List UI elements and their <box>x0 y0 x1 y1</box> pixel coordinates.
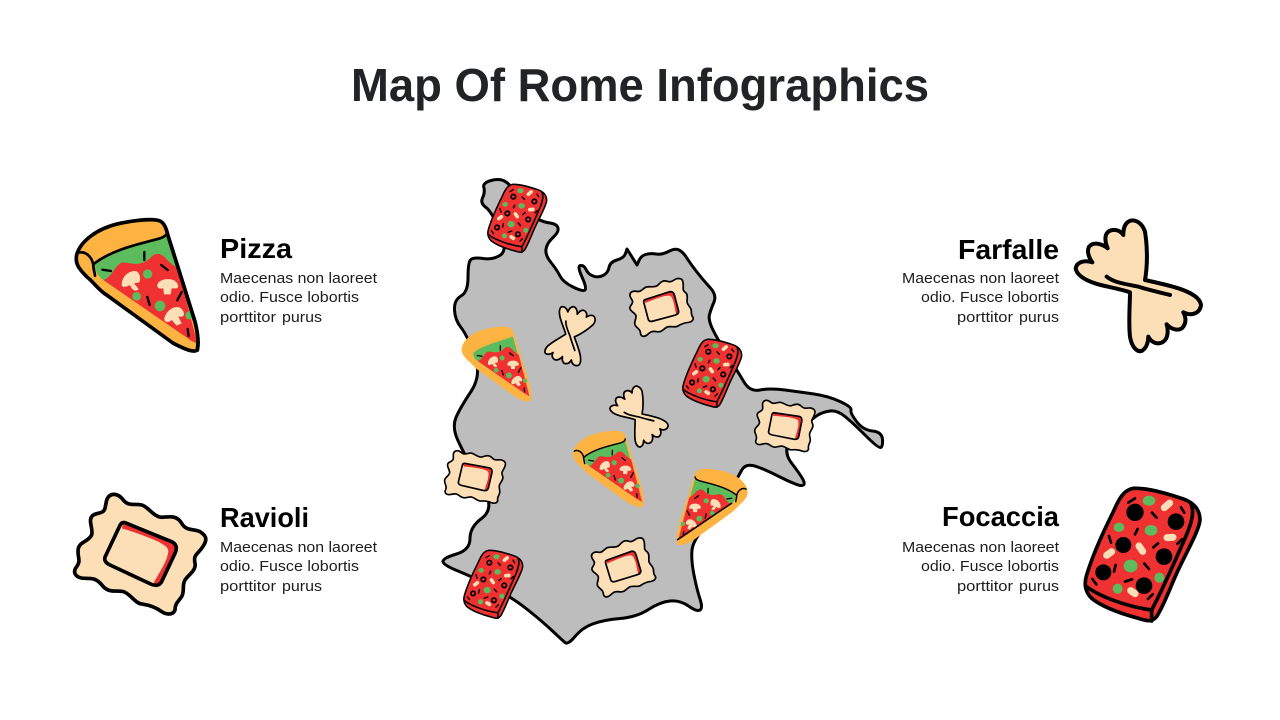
marker: ravioli bottom <box>578 522 668 612</box>
heading: ravioli: Ravioli <box>220 502 309 533</box>
text block: ravioli description <box>220 539 378 595</box>
icon: pizza slice <box>76 220 198 351</box>
text block: farfalle description <box>902 270 1060 326</box>
heading: pizza: Pizza <box>220 233 292 264</box>
marker: ravioli left <box>437 441 513 513</box>
marker: farfalle centre <box>610 386 668 447</box>
marker: ravioli right <box>746 389 824 463</box>
title: Map Of Rome Infographics <box>351 59 929 111</box>
text block: farfalle description: purus <box>1019 309 1059 326</box>
text block: pizza description: Maecenas non laoreet <box>220 270 378 287</box>
icon: farfalle <box>1076 220 1201 351</box>
text block: focaccia description: porttitor <box>957 578 1013 595</box>
marker: pizza right <box>677 470 746 544</box>
marker: focaccia top <box>488 184 547 252</box>
marker: pizza left <box>463 328 530 400</box>
marker: focaccia right <box>683 339 742 407</box>
panel: farfalle <box>902 220 1201 351</box>
text block: ravioli description: porttitor <box>220 578 276 595</box>
map silhouette <box>443 180 883 643</box>
marker: ravioli top <box>616 262 706 352</box>
panel: focaccia <box>902 488 1200 621</box>
text block: pizza description: odio. Fusce lobortis <box>220 289 359 306</box>
heading: farfalle: Farfalle <box>958 234 1059 265</box>
icon: focaccia <box>1085 488 1200 621</box>
text block: farfalle description: Maecenas non laoreet <box>902 270 1060 287</box>
icon: ravioli <box>75 494 206 614</box>
text block: pizza description: porttitor <box>220 309 276 326</box>
text block: ravioli description: purus <box>282 578 322 595</box>
text block: ravioli description: odio. Fusce lobortis <box>220 558 359 575</box>
map of Rome with food markers <box>437 180 883 643</box>
marker: focaccia bottom <box>464 550 523 618</box>
panel: ravioli <box>75 494 378 614</box>
text block: farfalle description: odio. Fusce lobortis <box>921 289 1059 306</box>
text block: pizza description <box>220 270 378 326</box>
heading: focaccia: Focaccia <box>942 501 1059 532</box>
text block: farfalle description: porttitor <box>957 309 1013 326</box>
text block: ravioli description: Maecenas non laoreet <box>220 539 378 556</box>
marker: pizza centre <box>574 432 642 506</box>
text block: focaccia description: odio. Fusce lobortis <box>921 558 1059 575</box>
text block: focaccia description: Maecenas non laoreet <box>902 539 1060 556</box>
text block: focaccia description: purus <box>1019 578 1059 595</box>
panel: pizza <box>76 220 378 351</box>
marker: farfalle upper <box>529 295 612 377</box>
text block: pizza description: purus <box>282 309 322 326</box>
text block: focaccia description <box>902 539 1060 595</box>
